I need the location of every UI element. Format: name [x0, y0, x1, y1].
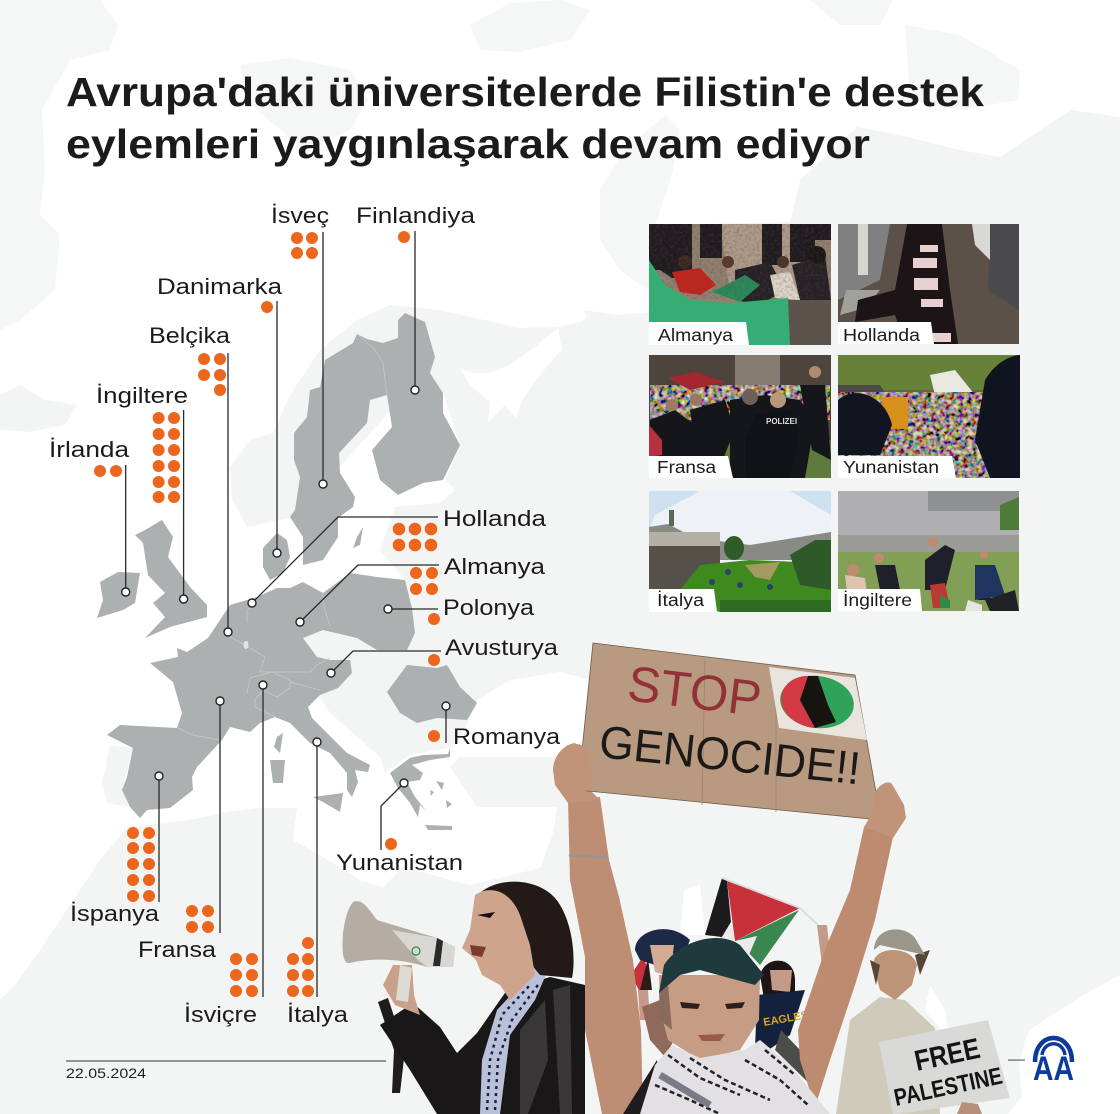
- background protesters: [631, 878, 940, 1114]
- map: United Kingdom: [135, 520, 207, 638]
- keffiyeh: [640, 1040, 830, 1114]
- country: İngiltere: İngiltere: [96, 383, 188, 408]
- photo: İngiltere: [838, 491, 1019, 611]
- title: eylemleri yaygınlaşarak devam ediyor: [66, 121, 870, 167]
- map: Romania: [387, 665, 477, 723]
- map of European countries with protests: [97, 313, 477, 830]
- photo: İtalya: [649, 491, 831, 612]
- photo: İngiltere: İngiltere: [843, 590, 912, 610]
- country: Almanya: [296, 554, 546, 626]
- country: Belçika: [149, 323, 232, 636]
- country: İsveç: [271, 203, 329, 488]
- country: İngiltere: [96, 383, 188, 603]
- map: continental Europe: [107, 573, 415, 818]
- country: Avusturya: [327, 635, 559, 677]
- photo: Fransa: [649, 355, 831, 478]
- photo: Almanya: Almanya: [658, 325, 733, 345]
- title: Avrupa'daki üniversitelerde Filistin'e destek: [66, 69, 984, 115]
- AA logo: [1008, 1038, 1074, 1088]
- country: Yunanistan: [336, 779, 463, 875]
- protest sign: Stop Genocide: [578, 643, 881, 820]
- woman in navy t-shirt: [755, 925, 830, 1051]
- country: İsveç: İsveç: [271, 203, 329, 228]
- country: İrlanda: [49, 437, 130, 596]
- left arm: [568, 797, 643, 1114]
- protest sign: Free Palestine: FREE: [912, 1033, 983, 1078]
- photo: İtalya: İtalya: [657, 590, 704, 610]
- footer rule and date: 22.05.2024: [66, 1066, 147, 1081]
- country: İspanya: [70, 772, 163, 926]
- main protester with raised arms: [553, 743, 893, 1114]
- photo: Almanya: [649, 224, 831, 345]
- map: Sardinia and Corsica: [270, 733, 285, 783]
- country: Fransa: Fransa: [138, 937, 217, 962]
- woman in hat: [631, 929, 690, 1057]
- country: Danimarka: Danimarka: [157, 274, 283, 299]
- country: Fransa: [138, 697, 224, 962]
- megaphone strap: [378, 998, 405, 1093]
- Palestinian flag: [705, 878, 819, 965]
- map: Sicily: [313, 793, 343, 812]
- map: Greece: [353, 527, 452, 830]
- map: Denmark: [263, 533, 290, 580]
- map: Ireland: [97, 572, 140, 618]
- country: Belçika: Belçika: [149, 323, 231, 348]
- megaphone: [343, 901, 455, 967]
- shirt shoulders: [623, 1060, 665, 1114]
- protest sign: Stop Genocide: STOP: [625, 655, 764, 727]
- photo: Yunanistan: Yunanistan: [843, 457, 939, 477]
- country: İtalya: İtalya: [287, 1002, 349, 1027]
- country: Romanya: Romanya: [453, 724, 561, 749]
- photo: Hollanda: Hollanda: [843, 325, 920, 345]
- photo: Hollanda: [838, 224, 1019, 345]
- leader lines: [126, 231, 446, 997]
- map: Sweden and Finland: [290, 313, 460, 565]
- country: İrlanda: İrlanda: [49, 437, 130, 462]
- cap: [659, 938, 764, 993]
- country: Finlandiya: Finlandiya: [356, 203, 476, 228]
- photo: Fransa: Fransa: [657, 457, 716, 477]
- country: Almanya: Almanya: [444, 554, 546, 579]
- hand with handle: [383, 965, 420, 1015]
- country: Polonya: [384, 595, 535, 625]
- country: Danimarka: [157, 274, 283, 557]
- hair: [480, 882, 574, 978]
- country: Hollanda: [248, 506, 547, 607]
- country: Polonya: Polonya: [443, 595, 535, 620]
- protest sign: Free Palestine: PALESTINE: [892, 1063, 1005, 1112]
- left hand fingers over sign: [566, 744, 592, 792]
- woman in navy t-shirt: EAGLES: [762, 1009, 809, 1029]
- title: [66, 69, 984, 167]
- photo: Fransa: POLIZEI: [766, 417, 797, 426]
- country: İsviçre: İsviçre: [184, 1002, 257, 1027]
- country: Finlandiya: [356, 203, 476, 394]
- megaphone protester: [343, 882, 585, 1114]
- left hand: [553, 743, 600, 803]
- man with cap: [836, 929, 940, 1114]
- country: İsviçre: [184, 681, 267, 1027]
- right arm: [798, 827, 893, 1107]
- country: Yunanistan: Yunanistan: [336, 850, 463, 875]
- jacket: [380, 977, 585, 1114]
- country: Romanya: [428, 702, 561, 749]
- face: [659, 975, 760, 1060]
- protest sign: Stop Genocide: GENOCIDE!!: [597, 715, 863, 794]
- country: İtalya: [287, 738, 349, 1027]
- protest sign: Free Palestine: [879, 1020, 1010, 1114]
- photo: Yunanistan: [838, 355, 1020, 478]
- scarf: [480, 962, 548, 1114]
- painted emblem: [769, 667, 867, 740]
- AA logo: AA: [1033, 1050, 1074, 1088]
- country: Avusturya: Avusturya: [445, 635, 559, 660]
- country: Hollanda: Hollanda: [443, 506, 547, 531]
- face and neck: [462, 890, 535, 1000]
- right hand over sign: [864, 782, 906, 838]
- country: İspanya: İspanya: [70, 901, 160, 926]
